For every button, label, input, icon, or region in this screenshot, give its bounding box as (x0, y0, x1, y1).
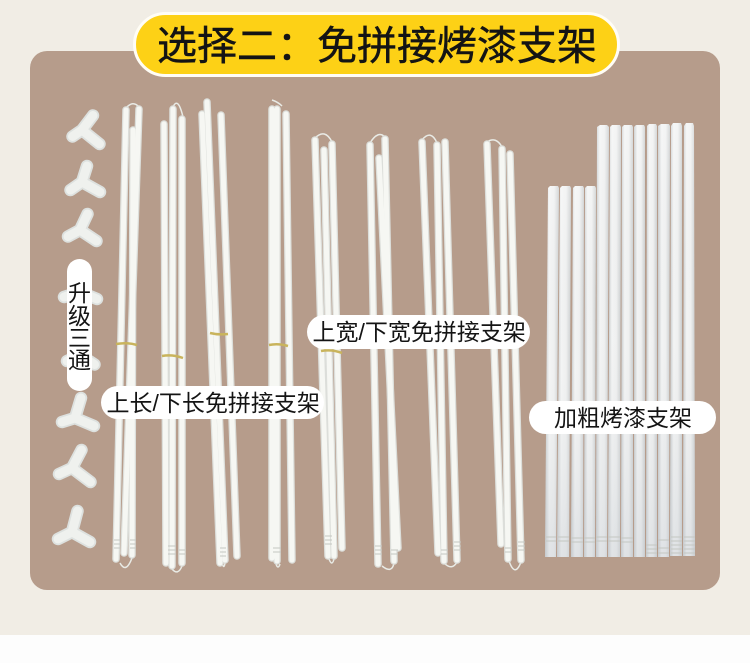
label: upgraded three-way connector: 升 (68, 280, 91, 306)
wide frame rods: upper/lower width sets (315, 134, 525, 570)
label: upgraded three-way connector (67, 259, 92, 391)
title banner: 选择二：免拼接烤漆支架 (157, 24, 597, 68)
thick lacquered frame rods (545, 123, 695, 557)
label: upgraded three-way connector: 三 (68, 325, 91, 351)
title banner (134, 14, 618, 76)
label: thick lacquered frame: 加粗烤漆支架 (554, 405, 692, 431)
long frame rods: upper/lower length sets (114, 100, 292, 572)
label: upgraded three-way connector: 通 (68, 347, 91, 373)
label: upper/lower length frame: 上长/下长免拼接支架 (106, 390, 320, 416)
label: upgraded three-way connector: 级 (68, 303, 91, 329)
bottom white strip (0, 635, 750, 663)
label: upper/lower width frame: 上宽/下宽免拼接支架 (312, 319, 526, 345)
icon: three-way connectors column (58, 116, 100, 542)
panel: product photo background (30, 51, 720, 590)
label: thick lacquered frame (529, 401, 716, 434)
